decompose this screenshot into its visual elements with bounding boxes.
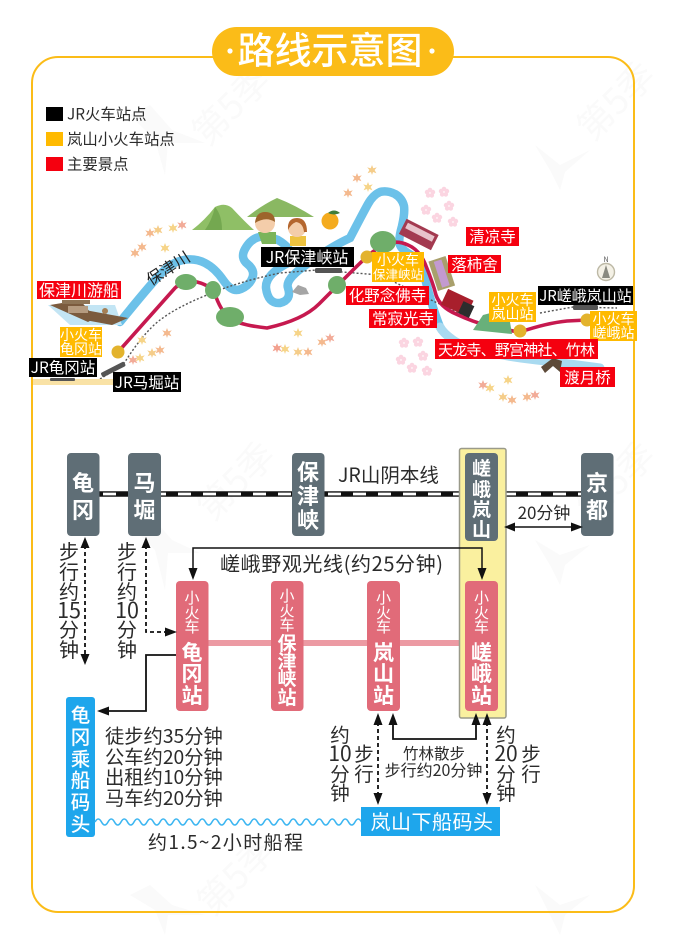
arrow: 岚山站 dashed to pier bbox=[374, 713, 382, 805]
boat pier: 龟冈乘船码头: 乘 bbox=[71, 743, 90, 772]
walk text: 步行约20分钟 (嵯峨): 钟 bbox=[496, 777, 516, 806]
boat pier: 龟冈乘船码头: 冈 bbox=[71, 721, 90, 750]
river wave bbox=[95, 819, 362, 825]
JR station: 保津峡: 峡 bbox=[297, 503, 319, 535]
line name: 嵯峨野观光线: 嵯峨野观光线(约25分钟) bbox=[220, 548, 443, 577]
transport time list: 马车约20分钟 bbox=[105, 783, 223, 811]
river bbox=[120, 191, 440, 327]
icon: sand bank bbox=[33, 379, 113, 385]
walk text: 步行约20分钟 (嵯峨): 步 bbox=[521, 738, 541, 767]
JR station: 马堀 bbox=[128, 453, 161, 536]
maple leaves bbox=[128, 165, 540, 405]
JR station: 马堀: 马 bbox=[133, 466, 156, 498]
label: 小火车保津峡站: 保津峡站 bbox=[373, 264, 423, 283]
label: 保津川游船: 保津川游船 bbox=[39, 277, 119, 301]
trolley station: 龟冈站 bbox=[176, 581, 208, 711]
bamboo walk text bbox=[385, 742, 482, 781]
walk text: 步行约10分钟 (岚山): 行 bbox=[354, 758, 374, 787]
legend: 主要景点 bbox=[67, 152, 129, 174]
bamboo walk text: 步行约20分钟 bbox=[385, 757, 482, 781]
trolley station: 嵯峨站 bbox=[465, 581, 498, 711]
Sagano scenic rail line bbox=[118, 242, 587, 352]
JR station: 京都: 都 bbox=[586, 493, 608, 525]
watermark: 第5季 bbox=[563, 48, 665, 150]
JR station: 保津峡: 保 bbox=[297, 455, 319, 487]
label: JR保津峡站: JR保津峡站 bbox=[266, 244, 348, 268]
map illustration bbox=[33, 165, 617, 405]
trolley station: 嵯峨站: 嵯 bbox=[471, 637, 492, 667]
trolley station: 龟冈站: 小 bbox=[184, 587, 200, 608]
JR station: 马堀: 堀 bbox=[133, 493, 156, 525]
icon: compass: N bbox=[603, 255, 609, 265]
icon: boat on Hozu river bbox=[48, 300, 128, 325]
trolley station: 保津峡站: 津 bbox=[277, 647, 297, 674]
label: 保津川: 保津川 bbox=[141, 244, 194, 290]
trolley station: 保津峡站: 站 bbox=[277, 683, 297, 710]
JR station: 嵯峨岚山: 嵯 bbox=[472, 454, 491, 481]
trolley station: 嵯峨站: 站 bbox=[471, 680, 492, 710]
JR station: 嵯峨岚山 bbox=[465, 453, 498, 542]
label: 小火车保津峡站: 小火车 bbox=[377, 250, 419, 270]
walk text: 步行约10分钟 (岚山): 步 bbox=[354, 738, 374, 767]
label: 小火车岚山站: 岚山站 bbox=[492, 304, 534, 324]
trolley station: 保津峡站: 车 bbox=[279, 614, 295, 635]
label: 小火车嵯峨站 bbox=[590, 309, 637, 343]
walk text: 步行约15分钟: 15 bbox=[57, 594, 81, 625]
line name: JR山阴本线: JR山阴本线 bbox=[338, 459, 439, 488]
icon: trolley train bbox=[399, 219, 474, 318]
arrow: 20分钟 bbox=[504, 499, 583, 532]
legend: 岚山小火车站点 bbox=[67, 128, 175, 150]
icon: JR station bars bbox=[50, 268, 598, 381]
trolley station: 岚山站: 站 bbox=[373, 680, 394, 710]
transport time list bbox=[105, 721, 223, 811]
watermark: 第5季 bbox=[183, 823, 285, 925]
label: JR马堀站: JR马堀站 bbox=[115, 371, 179, 393]
walk text: 步行约10分钟: 钟 bbox=[117, 634, 137, 663]
legend: JR火车站点 bbox=[67, 102, 147, 124]
walk text: 步行约15分钟: 分 bbox=[59, 614, 79, 643]
trolley station: 岚山站: 小 bbox=[376, 587, 391, 608]
icon: compass bbox=[598, 255, 614, 280]
river: lower reach bbox=[440, 327, 600, 368]
walk text: 步行约15分钟: 约 bbox=[59, 576, 79, 605]
arrow: 嵯峨站 dashed to pier bbox=[482, 713, 492, 805]
JR Sanin main line bbox=[99, 491, 581, 497]
walk text: 步行约10分钟 (岚山): 钟 bbox=[330, 777, 350, 806]
arrow: 20分钟: 20分钟 bbox=[518, 499, 570, 524]
watermark bbox=[130, 48, 665, 935]
trolley station: 龟冈站: 火 bbox=[184, 602, 200, 623]
walk text: 步行约20分钟 (嵯峨): 约 bbox=[496, 719, 516, 748]
walk text: 步行约10分钟: 步 bbox=[117, 536, 137, 565]
cherry blossoms bbox=[396, 187, 458, 376]
bamboo walk text: 竹林散步 bbox=[403, 742, 465, 764]
label: 小火车嵯峨站: 嵯峨站 bbox=[592, 323, 634, 343]
boat pier: 岚山下船码头: 岚山下船码头 bbox=[370, 806, 494, 835]
JR station: 嵯峨岚山: 山 bbox=[472, 515, 491, 542]
watermark: 第5季 bbox=[183, 428, 285, 530]
label: 常寂光寺: 常寂光寺 bbox=[372, 307, 434, 329]
boat pier: 龟冈乘船码头: 头 bbox=[71, 808, 90, 837]
walk text: 步行约10分钟: 行 bbox=[117, 556, 137, 585]
JR station: 龟冈 bbox=[67, 453, 100, 536]
walk text: 步行约15分钟: 钟 bbox=[59, 634, 79, 663]
icon: Togetsukyo bridge bbox=[541, 358, 562, 373]
label: 清凉寺: 清凉寺 bbox=[469, 225, 516, 247]
JR station: 京都 bbox=[581, 453, 614, 536]
JR station: 嵯峨岚山: 岚 bbox=[472, 495, 491, 522]
JR station: 龟冈: 龟 bbox=[72, 466, 94, 498]
trolley station: 保津峡站 bbox=[271, 581, 304, 711]
label: 小火车龟冈站: 小火车 bbox=[60, 325, 102, 345]
connector: Sagano scenic line bbox=[188, 548, 486, 580]
icon: orange bbox=[322, 210, 340, 230]
trolley station: 嵯峨站: 峨 bbox=[471, 658, 492, 688]
trolley station: 龟冈站: 龟 bbox=[182, 637, 202, 667]
walk text: 步行约10分钟 (岚山): 分 bbox=[330, 758, 350, 787]
walk text: 步行约10分钟 (岚山): 约 bbox=[330, 719, 350, 748]
trolley station: 龟冈站: 站 bbox=[182, 680, 202, 710]
label: JR龟冈站: JR龟冈站 bbox=[31, 356, 95, 378]
walk text: 步行约15分钟: 行 bbox=[59, 556, 79, 585]
icon: trolley stops bbox=[112, 250, 594, 358]
icon: trees along the line bbox=[175, 231, 512, 334]
label: 小火车保津峡站 bbox=[372, 250, 424, 283]
trolley station: 嵯峨站: 车 bbox=[474, 616, 489, 637]
JR station: 嵯峨岚山: 峨 bbox=[472, 475, 491, 502]
legend bbox=[46, 102, 175, 174]
icon: rock bbox=[292, 285, 309, 295]
trolley station: 岚山站 bbox=[367, 581, 400, 711]
label: 小火车龟冈站 bbox=[60, 325, 102, 359]
trolley station: 保津峡站: 火 bbox=[279, 600, 295, 621]
boat pier: 龟冈乘船码头: 船 bbox=[71, 764, 90, 793]
watermark: 第5季 bbox=[178, 53, 280, 155]
label: 天龙寺、野宫神社、竹林: 天龙寺、野宫神社、竹林 bbox=[438, 339, 595, 360]
transport time list: 公车约20分钟 bbox=[105, 742, 223, 770]
label: 小火车岚山站: 小火车 bbox=[492, 290, 534, 310]
JR station: 龟冈: 冈 bbox=[72, 493, 94, 525]
transport time list: 徒步约35分钟 bbox=[105, 721, 223, 749]
watermark: 第5季 bbox=[563, 428, 665, 530]
label: 化野念佛寺: 化野念佛寺 bbox=[349, 284, 426, 306]
walk text: 步行约20分钟 (嵯峨): 分 bbox=[496, 758, 516, 787]
trolley station: 龟冈站: 车 bbox=[184, 616, 200, 637]
icon: children bbox=[255, 212, 307, 246]
walk text: 步行约10分钟 (岚山): 10 bbox=[328, 738, 352, 768]
icon: green hills bbox=[192, 198, 314, 230]
walk text: 步行约10分钟: 分 bbox=[117, 614, 137, 643]
highlight: Saga-Arashiyama transfer bbox=[460, 448, 506, 718]
walk text: 步行约10分钟: 约 bbox=[117, 576, 137, 605]
trolley station: 嵯峨站: 火 bbox=[474, 602, 489, 623]
trolley station: 嵯峨站: 小 bbox=[474, 587, 489, 608]
arrow: 龟冈站 to boat pier bbox=[97, 655, 176, 716]
boat pier: 龟冈乘船码头: 龟 bbox=[71, 699, 90, 728]
arrow: dashed walk from 龟冈 bbox=[80, 537, 90, 665]
boat pier: 龟冈乘船码头: 码 bbox=[71, 786, 90, 815]
JR station: 保津峡: 津 bbox=[297, 479, 319, 511]
label: 小火车嵯峨站: 小火车 bbox=[592, 309, 634, 329]
trolley station: 龟冈站: 冈 bbox=[182, 658, 202, 688]
walk text: 步行约20分钟 (嵯峨): 20 bbox=[494, 738, 518, 768]
JR station: 京都: 京 bbox=[586, 466, 608, 498]
label: 小火车龟冈站: 龟冈站 bbox=[60, 339, 102, 359]
trolley station: 岚山站: 山 bbox=[373, 658, 394, 688]
trolley line bbox=[208, 640, 459, 646]
trolley station: 保津峡站: 小 bbox=[279, 585, 295, 606]
transport time list: 出租约10分钟 bbox=[105, 762, 223, 790]
title: 路线示意图 bbox=[238, 20, 422, 74]
JR station: 保津峡 bbox=[292, 453, 324, 536]
walk text: 步行约20分钟 (嵯峨): 行 bbox=[521, 758, 541, 787]
walk text: 步行约10分钟: 10 bbox=[115, 594, 139, 625]
label: 小火车岚山站 bbox=[489, 290, 536, 324]
trolley station: 保津峡站: 保 bbox=[277, 629, 297, 656]
trolley station: 保津峡站: 峡 bbox=[277, 664, 297, 691]
arrow: bamboo walk bbox=[388, 713, 480, 739]
label: JR嵯峨岚山站: JR嵯峨岚山站 bbox=[539, 285, 632, 306]
JR railway dotted line bbox=[100, 270, 617, 379]
trolley station: 岚山站: 火 bbox=[376, 602, 391, 623]
boat duration: 约1.5~2小时船程 bbox=[148, 828, 303, 855]
walk text: 步行约15分钟: 步 bbox=[59, 536, 79, 565]
label: 落柿舍: 落柿舍 bbox=[451, 253, 498, 275]
boat pier: 龟冈乘船码头 bbox=[66, 697, 95, 837]
trolley station: 岚山站: 车 bbox=[376, 616, 391, 637]
trolley station: 岚山站: 岚 bbox=[373, 637, 394, 667]
arrow: dashed walk from 马堀 bbox=[142, 537, 177, 636]
label: 渡月桥: 渡月桥 bbox=[564, 366, 611, 388]
